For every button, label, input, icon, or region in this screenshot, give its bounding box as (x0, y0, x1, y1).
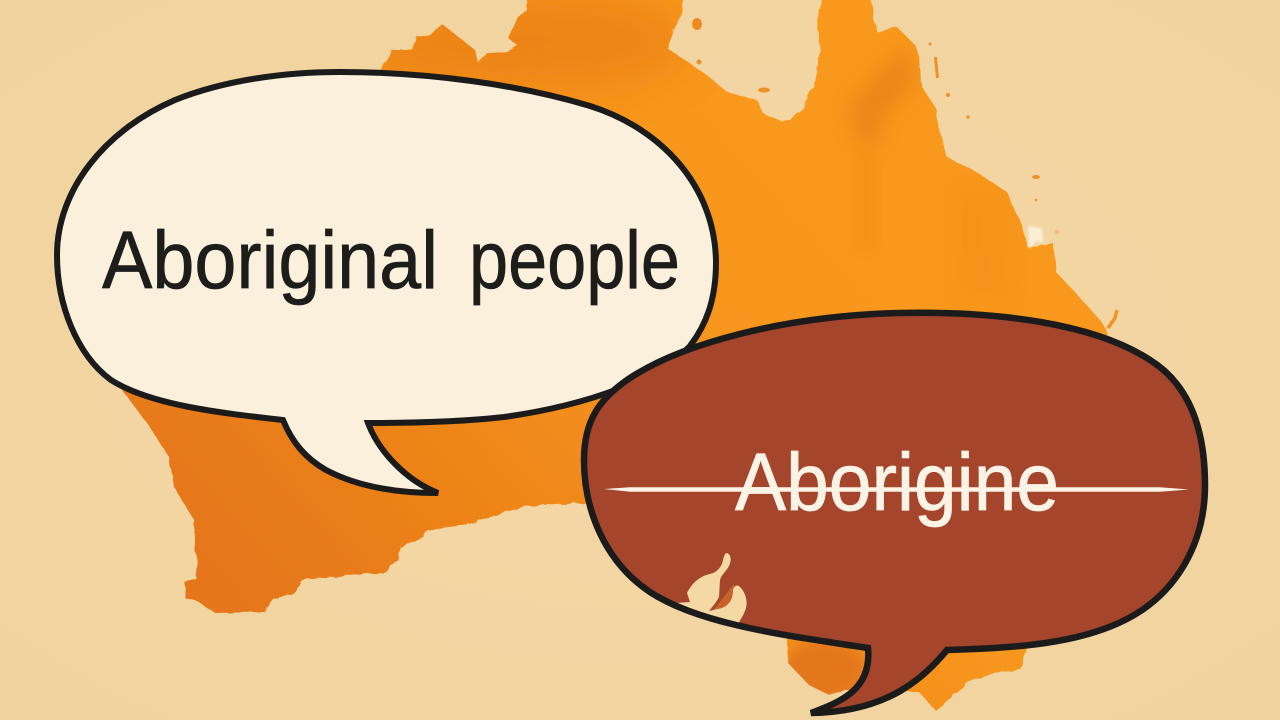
correct term: people (469, 215, 680, 306)
islands (692, 18, 1117, 328)
crossed-out term: Aborigine (735, 437, 1059, 528)
bubble shape (584, 313, 1205, 713)
correct term (102, 215, 680, 306)
interior washes (350, 0, 1010, 700)
right-side wash (1010, 202, 1012, 205)
strikethrough line (604, 487, 1189, 492)
darker blotch (850, 45, 915, 145)
southern chunk shading (788, 642, 864, 695)
bubble shape (57, 72, 716, 493)
north-west darker wash (350, 0, 690, 90)
mainland silhouette (122, 0, 1107, 710)
bubble outline (584, 313, 1205, 713)
map of Australia (122, 0, 1117, 710)
reef glint (1028, 226, 1043, 248)
speech bubble: Aboriginal people (57, 72, 716, 493)
vertical wash streak (855, 150, 875, 250)
correct term: Aboriginal (102, 215, 438, 306)
speech bubble: Aborigine (584, 313, 1205, 713)
map showing through bubble (678, 553, 747, 622)
